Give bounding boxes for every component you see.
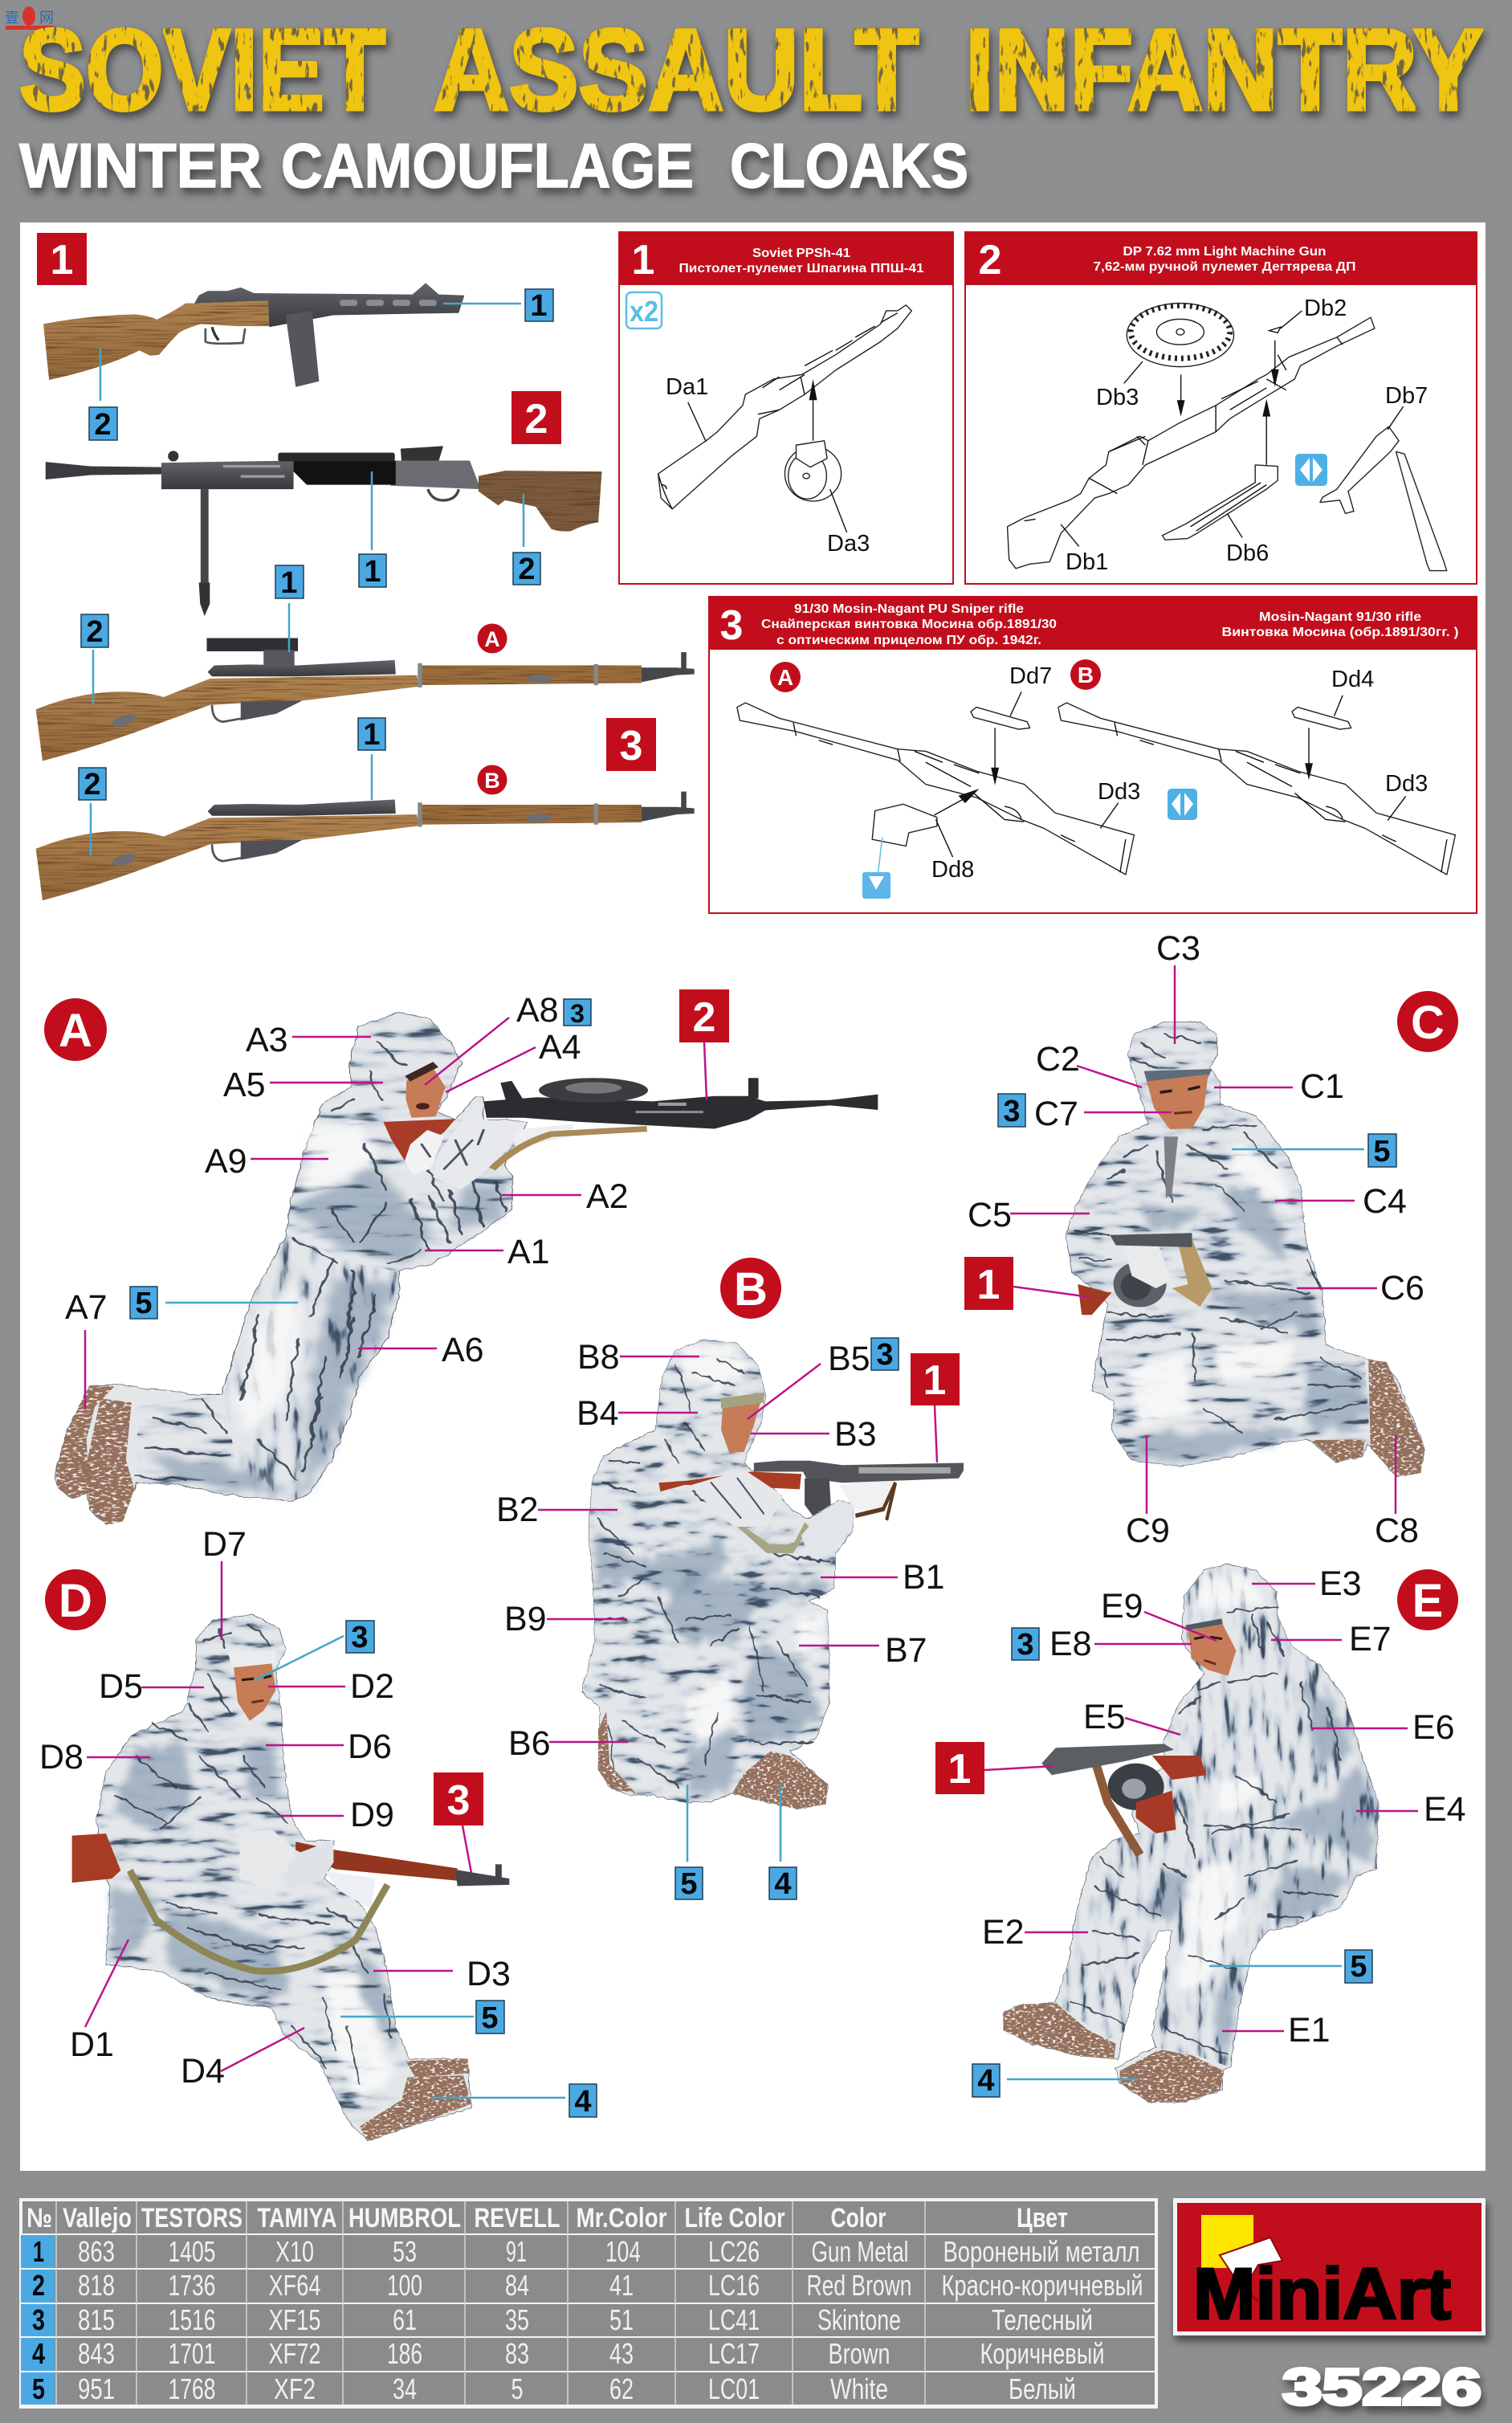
table row 4: 43 <box>609 2337 634 2370</box>
callouts: soldier E: 4 <box>977 2064 995 2098</box>
figure badge B <box>720 1258 781 1319</box>
colour callout 2 on rifle B: 2 <box>84 768 101 802</box>
table row 2 <box>32 2269 1143 2302</box>
watermark logo: 网 <box>39 10 54 26</box>
part labels: Db7 <box>1385 383 1428 409</box>
callouts: soldier D: D2 <box>350 1667 394 1706</box>
callouts: soldier D: 3 <box>351 1621 369 1654</box>
callouts: soldier B: B9 <box>504 1600 547 1638</box>
colour callout 2 on PPSh: 2 <box>94 408 112 442</box>
table row 4 <box>32 2337 1105 2370</box>
table row 3: XF15 <box>268 2303 321 2336</box>
colour callout 1 on DP: 1 <box>364 555 381 589</box>
soldier E figure <box>1004 1564 1379 2102</box>
header 3: Снайперская винтовка Мосина обр.1891/30 <box>761 618 1057 631</box>
table row 1: 53 <box>393 2235 417 2268</box>
table row 3 <box>32 2303 1093 2336</box>
callouts: soldier C: C5 <box>968 1196 1012 1234</box>
callouts: soldier C: C1 <box>1300 1067 1344 1106</box>
product number: 35226 <box>1282 2358 1481 2416</box>
marker: weapon 1 <box>37 233 87 285</box>
figure badge C: C <box>1411 997 1445 1049</box>
colour reference table <box>19 2198 1158 2409</box>
title: ASSAULT <box>434 6 919 134</box>
callouts: soldier A: A1 <box>507 1233 550 1271</box>
icon: times two: x2 <box>630 295 658 328</box>
variant marker A: A <box>777 665 793 690</box>
table row 5: 5 <box>32 2372 45 2405</box>
watermark logo <box>5 6 54 30</box>
table header: TESTORS <box>141 2203 242 2233</box>
callouts: soldier D: D4 <box>181 2052 225 2091</box>
table row 2: 84 <box>505 2269 529 2302</box>
subtitle: CAMOUFLAGE <box>281 130 694 201</box>
icon: scope mount note <box>862 872 890 899</box>
marker: weapon 1: 1 <box>51 237 73 283</box>
header 2: 2 <box>979 237 1001 283</box>
part labels: Dd8 <box>931 857 974 883</box>
table row 2: Red Brown <box>806 2269 912 2302</box>
callouts: soldier D: D8 <box>39 1738 84 1776</box>
callouts: soldier E: E7 <box>1349 1620 1392 1658</box>
subtitle: CLOAKS <box>730 130 968 201</box>
soldier A figure <box>55 1013 878 1524</box>
marker: weapon 3: 3 <box>620 723 642 769</box>
callouts: soldier B <box>496 1338 960 1901</box>
icon: alternate parts <box>1168 789 1197 820</box>
table row 1: Gun Metal <box>811 2235 909 2268</box>
subtitle: WINTER <box>19 130 262 201</box>
callouts: soldier B: B3 <box>834 1415 877 1454</box>
callouts: soldier D: 4 <box>574 2085 592 2119</box>
part labels: Da1 <box>666 374 708 400</box>
colour callout 2 on DP <box>513 494 540 586</box>
table header: REVELL <box>474 2203 560 2233</box>
callouts: soldier D: D9 <box>350 1796 394 1834</box>
callouts: soldier A: A6 <box>442 1331 484 1369</box>
callouts: soldier D: D3 <box>467 1955 511 1993</box>
callouts: soldier A: 3 <box>570 999 585 1028</box>
panel: assembly 1 PPSh <box>619 232 953 584</box>
table row 3: Телесный <box>992 2303 1093 2336</box>
header 1: Soviet PPSh-41 <box>752 247 850 260</box>
line drawing: PPSh <box>658 305 911 532</box>
figure badge C <box>1397 991 1458 1052</box>
callouts: soldier E: E4 <box>1424 1790 1466 1829</box>
callouts: soldier E <box>935 1564 1466 2098</box>
texture: upper leg folds <box>225 1234 399 1501</box>
icon: PPSh-41 painted <box>43 283 464 387</box>
callouts: soldier D: 3 <box>447 1777 470 1824</box>
table row 3: 815 <box>78 2303 115 2336</box>
callouts: soldier B: B1 <box>903 1558 945 1597</box>
subtitle <box>19 130 968 201</box>
header 2 <box>965 232 1477 285</box>
part labels: Dd3 <box>1385 771 1428 797</box>
callouts: soldier B: B4 <box>577 1394 619 1433</box>
callouts: soldier C: 5 <box>1373 1135 1391 1169</box>
callouts: soldier C: 3 <box>1003 1095 1021 1128</box>
header 3: с оптическим прицелом ПУ обр. 1942г. <box>776 634 1041 647</box>
colour callout 2 on PPSh <box>89 349 117 442</box>
variant marker B: B <box>1078 663 1094 687</box>
line drawing: standard rifle <box>1058 695 1455 875</box>
callouts: soldier A: 5 <box>135 1287 153 1320</box>
table row 2: 100 <box>387 2269 422 2302</box>
icon: rifle B painted <box>36 792 695 900</box>
table header: TAMIYA <box>257 2203 337 2233</box>
callouts: soldier A: A7 <box>65 1288 108 1327</box>
table row 5 <box>32 2372 1076 2405</box>
table row 4: 843 <box>78 2337 115 2370</box>
panel: assembly 2 DP <box>965 232 1477 584</box>
header 3: Винтовка Мосина (обр.1891/30гг. ) <box>1222 626 1458 639</box>
part labels: Db1 <box>1066 549 1108 575</box>
callouts: soldier A: A9 <box>205 1142 247 1181</box>
table row 2: 41 <box>609 2269 634 2302</box>
callouts: soldier B: 1 <box>923 1357 946 1404</box>
colour callout 1 on rifle B <box>358 718 385 800</box>
colour callout 2 on rifle B <box>79 768 106 855</box>
callouts: soldier C: C2 <box>1036 1040 1080 1079</box>
table row 4: Brown <box>829 2337 890 2370</box>
callouts: soldier E: 5 <box>1350 1950 1367 1984</box>
line drawing: DP <box>1008 304 1447 571</box>
figure badge A: A <box>59 1005 92 1057</box>
callouts: soldier E: E3 <box>1319 1564 1362 1603</box>
marker: weapon 2: 2 <box>525 396 548 443</box>
callouts: soldier C: 1 <box>977 1262 1000 1308</box>
callouts: soldier E: E8 <box>1049 1625 1092 1663</box>
table row 5: 34 <box>393 2372 417 2405</box>
part labels: Dd4 <box>1331 667 1374 692</box>
table row 1: 1 <box>33 2235 44 2268</box>
part labels: Db3 <box>1096 385 1139 410</box>
table row 4: 186 <box>387 2337 422 2370</box>
title: SOVIET <box>19 6 385 134</box>
callouts: soldier E: E9 <box>1101 1587 1143 1626</box>
variant marker B <box>1070 659 1101 690</box>
callouts: soldier A <box>65 989 729 1409</box>
table row 5: 5 <box>511 2372 524 2405</box>
colour callout 2 on rifle A: 2 <box>86 615 104 649</box>
callouts: soldier A: A4 <box>539 1028 581 1067</box>
table row 1 <box>33 2235 1140 2268</box>
part labels <box>1066 296 1428 575</box>
table row 5: XF2 <box>274 2372 316 2405</box>
icon: DP machine gun painted <box>46 446 602 616</box>
figure badge B: B <box>734 1263 768 1316</box>
colour callout 1 on rifle A <box>275 565 304 652</box>
callouts: soldier D: 5 <box>481 2001 499 2035</box>
callouts: soldier C: C3 <box>1156 929 1200 968</box>
callouts: soldier B: 5 <box>680 1867 698 1901</box>
callouts: soldier A: A2 <box>586 1177 629 1216</box>
panel: painted weapons <box>36 233 695 900</box>
marker: weapon 2 <box>511 391 561 444</box>
callouts: soldier E: E6 <box>1412 1708 1455 1747</box>
line drawing: sniper rifle <box>737 691 1134 875</box>
callouts: soldier B: B5 <box>828 1340 870 1378</box>
callouts: soldier B: B8 <box>577 1338 620 1377</box>
part labels: Db2 <box>1304 296 1347 321</box>
callouts: soldier A: A3 <box>246 1021 288 1059</box>
variant marker A <box>477 623 507 654</box>
callouts: soldier D: D1 <box>70 2025 114 2064</box>
part labels: Db6 <box>1226 540 1269 566</box>
callouts: soldier D: D5 <box>99 1667 143 1706</box>
watermark logo: 壹 <box>5 10 19 26</box>
figure badge E: E <box>1412 1575 1443 1627</box>
table row 1: Вороненый металл <box>943 2235 1140 2268</box>
callouts: soldier E: 3 <box>1017 1628 1034 1662</box>
colour callout 2 on DP: 2 <box>518 553 536 586</box>
part labels <box>931 663 1428 883</box>
table header: HUMBROL <box>348 2203 461 2233</box>
table row 1: LC26 <box>708 2235 760 2268</box>
header 1: 1 <box>632 237 654 283</box>
table row 5: 62 <box>609 2372 634 2405</box>
callouts: soldier E: E5 <box>1083 1698 1126 1736</box>
panel: assembly 3 rifles <box>709 597 1477 913</box>
callouts: soldier C: C8 <box>1375 1511 1419 1550</box>
table row 3: 1516 <box>169 2303 215 2336</box>
callouts: soldier C <box>964 929 1424 1550</box>
table row 3: LC41 <box>708 2303 760 2336</box>
table header: Color <box>830 2203 886 2233</box>
marker: weapon 3 <box>606 718 656 771</box>
table header: № <box>26 2203 52 2233</box>
table row 5: 951 <box>78 2372 115 2405</box>
variant marker B <box>477 765 507 795</box>
table row 2: XF64 <box>268 2269 321 2302</box>
figure badge D <box>45 1569 106 1630</box>
table row 5: LC01 <box>708 2372 760 2405</box>
table row 2: LC16 <box>708 2269 760 2302</box>
table row 1: X10 <box>275 2235 314 2268</box>
table header: Цвет <box>1017 2203 1068 2233</box>
header 1: Пистолет-пулемет Шпагина ППШ-41 <box>679 262 924 275</box>
colour callout 1 on rifle B: 1 <box>363 718 381 752</box>
header 2: 7,62-мм ручной пулемет Дегтярева ДП <box>1094 260 1355 274</box>
texture: cloak folds <box>1066 1022 1371 1466</box>
callouts: soldier C: C6 <box>1380 1269 1424 1307</box>
texture: lower leg folds <box>137 1394 242 1497</box>
colour callout 1 on PPSh: 1 <box>530 289 548 323</box>
MiniArt logo <box>1173 2198 1486 2335</box>
callouts: soldier D: D6 <box>348 1728 392 1766</box>
header 1 <box>619 232 953 285</box>
variant marker B: B <box>484 769 500 793</box>
callouts: soldier E: E1 <box>1288 2011 1331 2050</box>
callouts: soldier B: B2 <box>496 1491 539 1529</box>
header 2: DP 7.62 mm Light Machine Gun <box>1123 245 1327 259</box>
variant marker A: A <box>484 627 500 651</box>
colour callout 1 on PPSh <box>443 289 553 323</box>
table row 4: 4 <box>32 2337 45 2370</box>
colour callout 1 on rifle A: 1 <box>280 566 298 600</box>
figure badge E <box>1397 1569 1458 1630</box>
figure badge A <box>44 998 107 1061</box>
icon: alternate parts <box>1295 454 1327 486</box>
table row 1: 104 <box>605 2235 641 2268</box>
callouts: soldier D <box>39 1525 597 2119</box>
table row 4: LC17 <box>708 2337 760 2370</box>
callouts: soldier E: 1 <box>948 1746 971 1793</box>
table row 3: 61 <box>393 2303 417 2336</box>
header 3 <box>709 597 1477 650</box>
title <box>19 6 1483 134</box>
colour callout 2 on rifle A <box>81 614 108 704</box>
callouts: soldier B: 3 <box>876 1338 894 1372</box>
figure badge D: D <box>59 1575 92 1627</box>
table row 5: Белый <box>1009 2372 1076 2405</box>
table header <box>26 2203 1068 2233</box>
part labels: Da3 <box>827 531 870 557</box>
part labels <box>666 374 870 557</box>
callouts: soldier C: C4 <box>1363 1182 1407 1221</box>
table row 1: 91 <box>506 2235 527 2268</box>
table header: Life Color <box>684 2203 785 2233</box>
part labels: Dd7 <box>1009 663 1052 689</box>
part labels: Dd3 <box>1098 779 1140 805</box>
table row 4: Коричневый <box>980 2337 1105 2370</box>
table row 2: 2 <box>32 2269 45 2302</box>
icon: sniper rifle A painted <box>36 638 695 761</box>
table row 3: 3 <box>32 2303 45 2336</box>
texture: cloak folds <box>1056 1564 1379 2067</box>
callouts: soldier E: E2 <box>982 1913 1025 1952</box>
table row 2: 1736 <box>169 2269 215 2302</box>
variant marker A <box>770 662 801 692</box>
table row 4: 1701 <box>169 2337 215 2370</box>
table row 3: 51 <box>609 2303 634 2336</box>
callouts: soldier A: A5 <box>223 1066 266 1104</box>
table row 3: 35 <box>505 2303 529 2336</box>
callouts: soldier B: B7 <box>885 1631 927 1670</box>
callouts: soldier A: A8 <box>516 991 559 1030</box>
callouts: soldier C: C9 <box>1126 1511 1170 1550</box>
table row 5: White <box>830 2372 888 2405</box>
table row 1: 863 <box>78 2235 115 2268</box>
texture: cloak folds <box>582 1340 854 1802</box>
callouts: soldier D: D7 <box>202 1525 247 1564</box>
header 3: Mosin-Nagant 91/30 rifle <box>1259 610 1421 624</box>
table header: Mr.Color <box>577 2203 666 2233</box>
table row 1: 1405 <box>169 2235 215 2268</box>
callouts: soldier C: C7 <box>1034 1095 1078 1133</box>
table header: Vallejo <box>63 2203 132 2233</box>
callouts: soldier B: 4 <box>774 1867 792 1901</box>
soldier C figure <box>1066 1022 1424 1477</box>
soldier D figure <box>72 1614 509 2141</box>
callouts: soldier B: B6 <box>508 1724 551 1763</box>
table row 2: 818 <box>78 2269 115 2302</box>
header 3: 3 <box>720 602 743 649</box>
table row 5: 1768 <box>169 2372 215 2405</box>
header 3: 91/30 Mosin-Nagant PU Sniper rifle <box>794 602 1024 616</box>
texture: torso folds <box>287 1013 523 1271</box>
colour callout 1 on DP <box>359 471 386 589</box>
table row 4: 83 <box>505 2337 529 2370</box>
table row 2: Красно-коричневый <box>941 2269 1143 2302</box>
texture: cloak folds <box>96 1614 410 2141</box>
MiniArt logo: MiniArt <box>1193 2254 1451 2335</box>
main white panel <box>20 222 1486 2171</box>
soldier B figure <box>582 1340 964 1809</box>
table row 3: Skintone <box>817 2303 901 2336</box>
table row 4: XF72 <box>268 2337 321 2370</box>
callouts: soldier A: 2 <box>693 994 715 1041</box>
